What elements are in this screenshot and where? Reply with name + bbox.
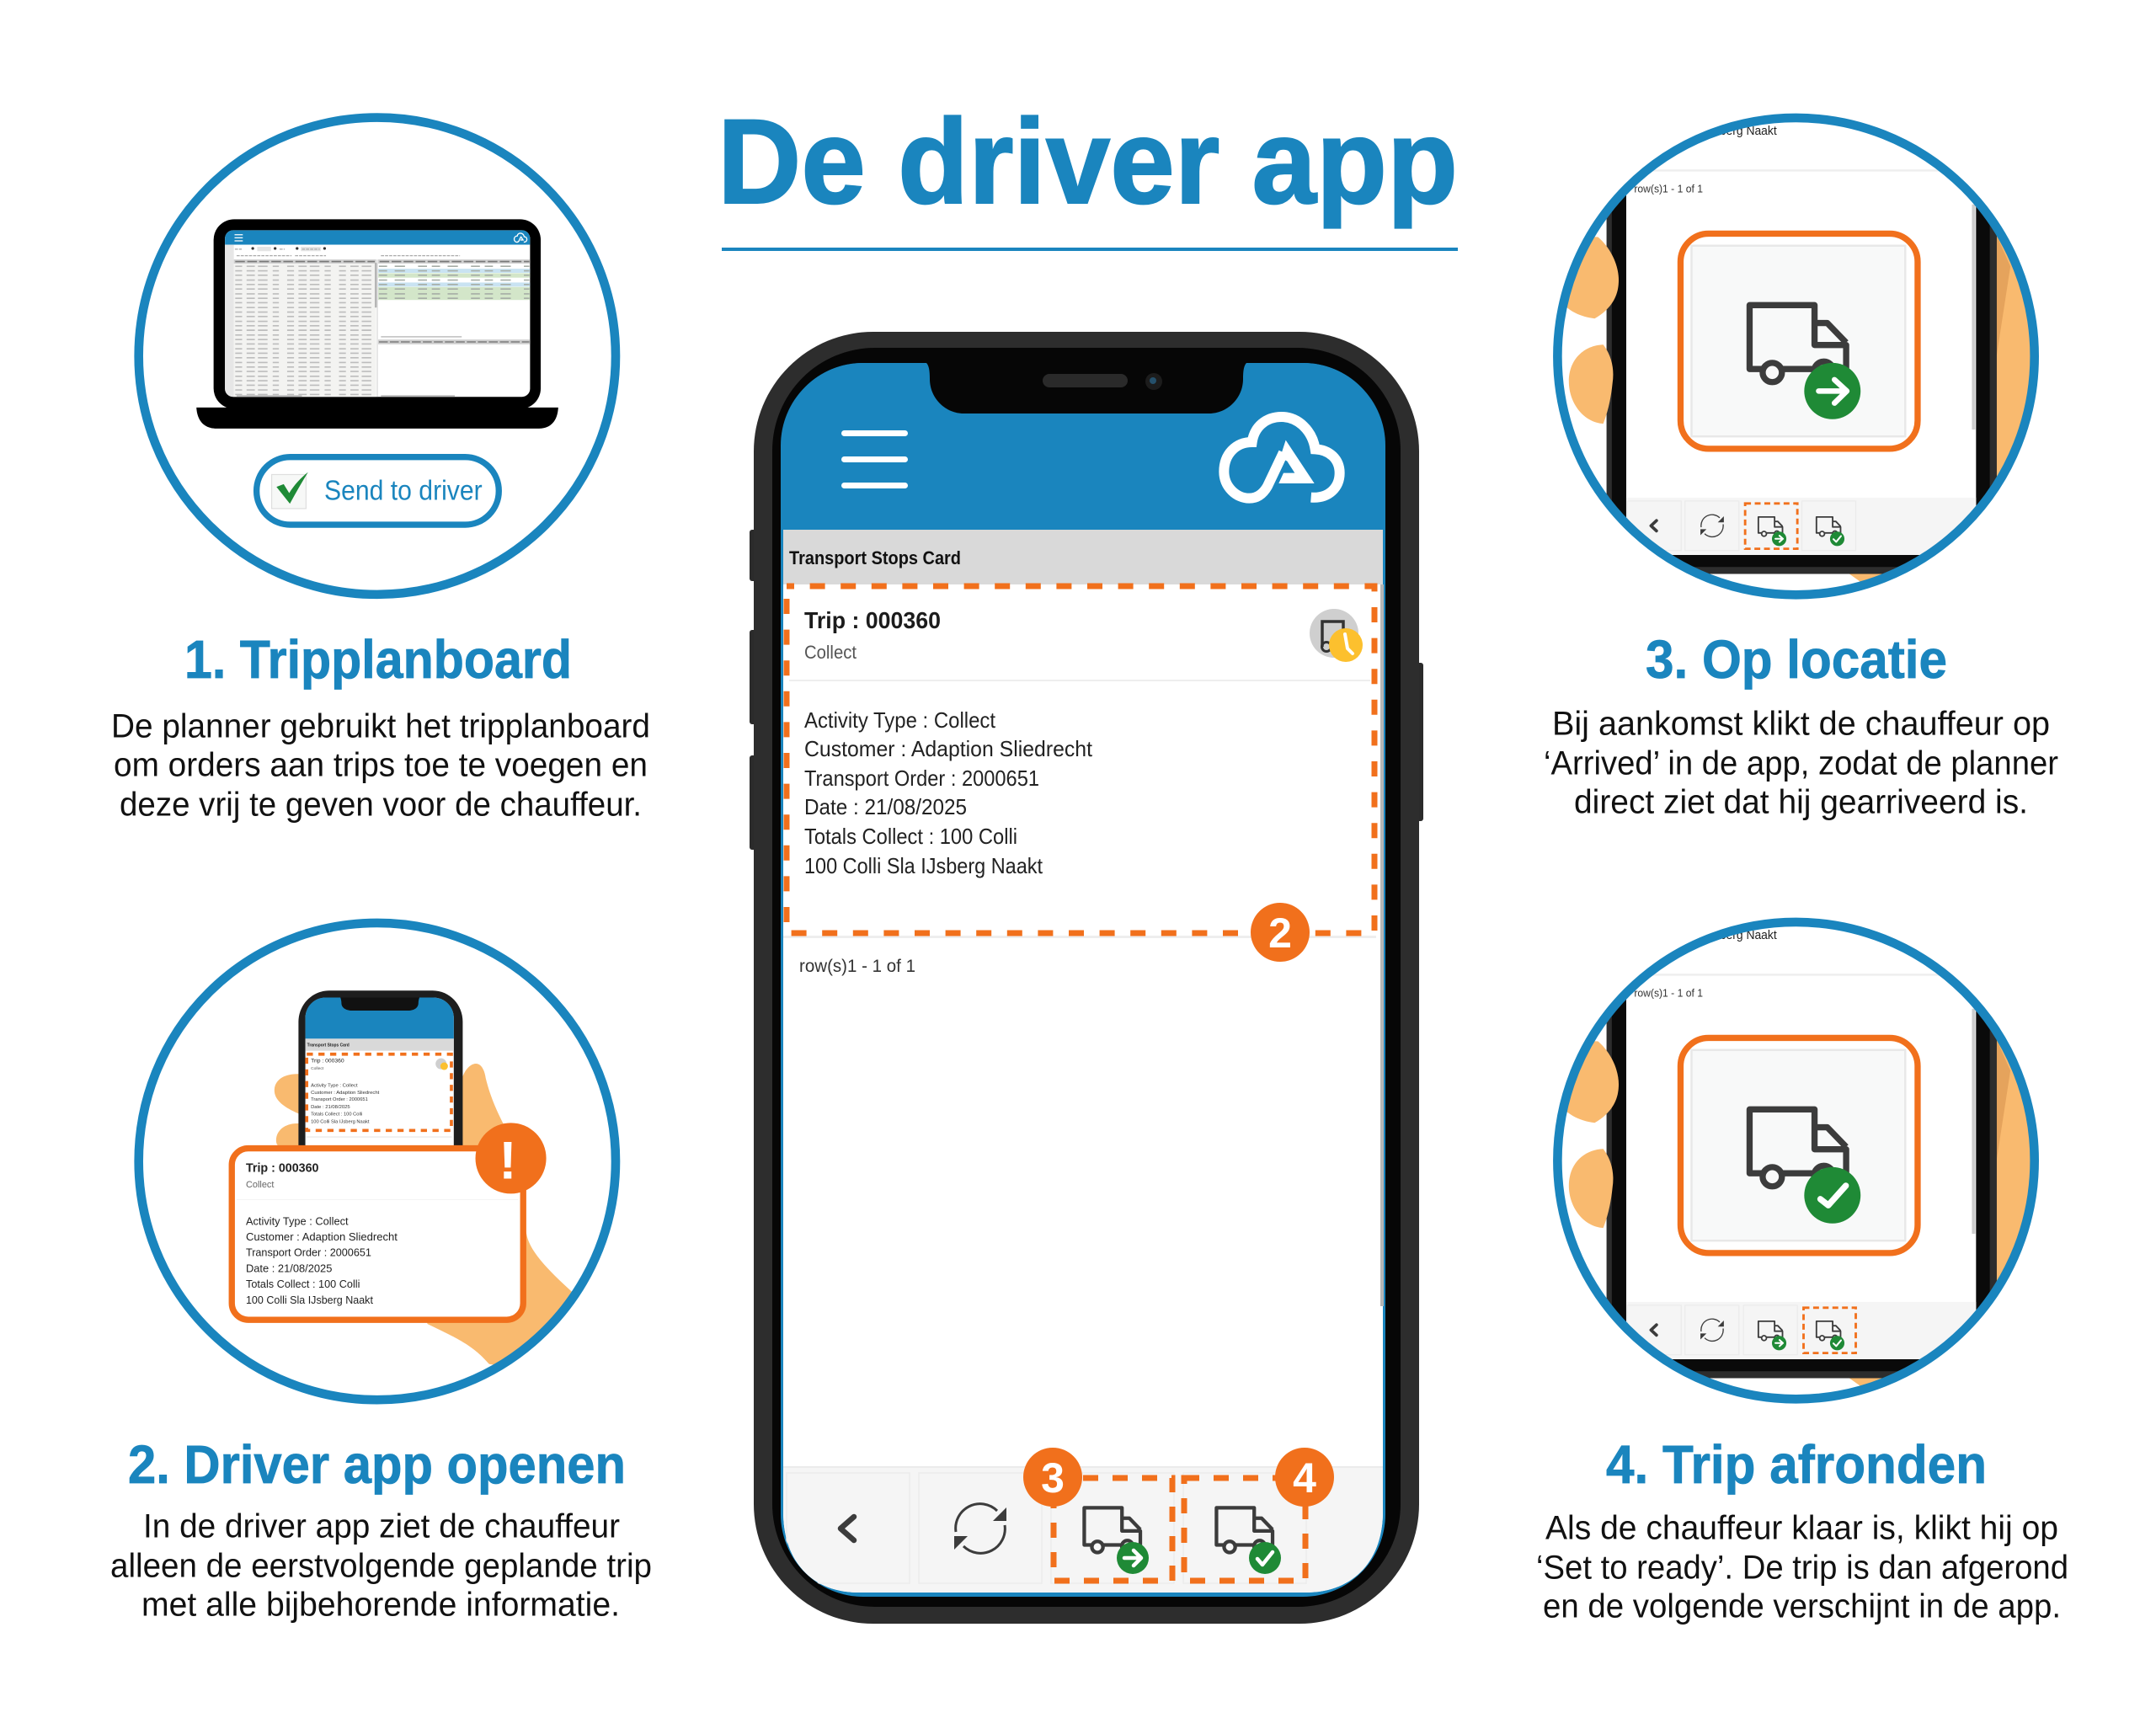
badge 3 <box>1023 1448 1082 1507</box>
icon: hand <box>275 1064 590 1374</box>
icon: refresh <box>954 1504 1006 1553</box>
panel: step 3 arrived circle: row(s)1 - 1 of 1 <box>1634 184 1703 195</box>
bottom toolbar <box>783 1466 1383 1593</box>
notch <box>926 363 1246 413</box>
icon: small phone: Collect <box>311 1066 324 1070</box>
text: step 2 description <box>110 1507 652 1624</box>
text: step 1 description <box>111 707 650 824</box>
badge 3: 3 <box>1041 1454 1065 1502</box>
trip card: Collect <box>804 642 857 663</box>
text: step 3 description: direct ziet dat hij gearriveerd is. <box>1574 783 2028 820</box>
icon: small phone <box>298 990 463 1145</box>
badge 2: 2 <box>1268 910 1292 957</box>
send to driver button: Send to driver <box>324 476 483 507</box>
icon: small phone: Totals Collect : 100 Colli <box>311 1112 362 1117</box>
badge 2 <box>1251 903 1310 962</box>
text: step 2 description: alleen de eerstvolgende geplande trip <box>110 1548 652 1585</box>
text: step 2 description: In de driver app ziet de chauffeur <box>143 1507 620 1545</box>
text: step 1 description: om orders aan trips toe te voegen en <box>114 746 648 783</box>
phone: main mockup <box>750 332 1423 1624</box>
panel: step 4 ready circle: 100 Colli Sla IJsberg Naakt <box>1636 929 1777 942</box>
icon: back chevron <box>841 1517 854 1540</box>
text: step 1 description: deze vrij te geven voor de chauffeur. <box>120 787 642 824</box>
trip card: Trip : 000360 <box>804 607 941 633</box>
screen body <box>783 530 1383 1593</box>
bottom toolbar <box>1626 498 1976 555</box>
text: step 4 description <box>1536 1509 2068 1625</box>
badge 4: 4 <box>1293 1454 1316 1502</box>
callout: trip card: Activity Type : Collect <box>246 1215 349 1228</box>
highlight: dashed ready button <box>1184 1478 1305 1581</box>
section bar: Transport Stops Card: Transport Stops Card <box>789 547 961 568</box>
highlight: dashed trip card <box>787 586 1374 933</box>
heading: step 4: 4. Trip afronden <box>1606 1434 1987 1495</box>
panel: step 4 ready circle <box>1553 922 2038 1399</box>
icon: small phone: Date : 21/08/2025 <box>311 1105 350 1110</box>
send to driver button <box>257 457 499 525</box>
panel: step 1 tripplanboard circle <box>139 118 616 595</box>
icon: small phone: Trip : 000360 <box>311 1059 344 1064</box>
panel: step 3 arrived circle <box>1553 118 2038 595</box>
callout: trip card: 100 Colli Sla IJsberg Naakt <box>246 1294 373 1306</box>
text: step 4 description: Als de chauffeur klaar is, klikt hij op <box>1545 1509 2058 1546</box>
text: step 1 description: De planner gebruikt het tripplanboard <box>111 707 650 744</box>
text: step 2 description: met alle bijbehorende informatie. <box>141 1587 620 1624</box>
badge 4 <box>1275 1448 1334 1507</box>
callout: trip card: Transport Order : 2000651 <box>246 1246 371 1259</box>
icon: cloud logo <box>1224 417 1340 499</box>
icon: laptop <box>196 219 558 429</box>
icon: alert badge <box>476 1123 547 1193</box>
text: step 3 description <box>1544 706 2058 820</box>
icon: small phone: Transport Order : 2000651 <box>311 1097 368 1102</box>
heading: step 3: 3. Op locatie <box>1646 629 1947 690</box>
title: De driver app <box>718 95 1458 229</box>
panel: step 2 driver app circle <box>139 923 616 1400</box>
text: step 3 description: Bij aankomst klikt de chauffeur op <box>1552 706 2050 743</box>
row count: row(s)1 - 1 of 1 <box>799 957 915 976</box>
icon: hand and phone edge <box>1566 1000 2030 1386</box>
icon: enlarged truck ready <box>1680 1038 1918 1253</box>
trip card: Activity Type : Collect <box>804 707 996 733</box>
trip card: 100 Colli Sla IJsberg Naakt <box>804 853 1043 878</box>
callout: trip card: Date : 21/08/2025 <box>246 1262 332 1274</box>
panel: step 3 arrived circle: 100 Colli Sla IJsberg Naakt <box>1636 125 1777 138</box>
trip card <box>789 607 1370 878</box>
text: step 4 description: en de volgende verschijnt in de app. <box>1543 1588 2061 1625</box>
bottom toolbar <box>1626 1302 1976 1359</box>
icon: truck arrived <box>1084 1507 1149 1574</box>
infographic canvas <box>111 113 2067 1625</box>
phone side buttons <box>750 530 1423 850</box>
text: step 4 description: ‘Set to ready’. De trip is dan afgerond <box>1536 1550 2068 1587</box>
icon: alert badge: ! <box>499 1131 516 1190</box>
trip card: Transport Order : 2000651 <box>804 766 1039 791</box>
icon: hamburger menu <box>841 430 908 488</box>
callout: trip card: Trip : 000360 <box>246 1161 318 1175</box>
trip card: Totals Collect : 100 Colli <box>804 824 1017 849</box>
icon: small phone: Customer : Adaption Sliedrecht <box>311 1091 380 1096</box>
callout: trip card: Totals Collect : 100 Colli <box>246 1278 360 1290</box>
heading: step 2: 2. Driver app openen <box>128 1434 626 1495</box>
highlight: dashed arrived button <box>1054 1478 1172 1581</box>
app header <box>803 363 1361 388</box>
icon: small phone: Transport Stops Card <box>307 1043 350 1048</box>
icon: truck status clock <box>1310 609 1363 662</box>
section bar: Transport Stops Card <box>783 530 1383 584</box>
icon: enlarged truck arrived <box>1680 233 1918 449</box>
text: step 3 description: ‘Arrived’ in de app, zodat de planner <box>1544 744 2058 782</box>
icon: small phone: Activity Type : Collect <box>311 1084 358 1089</box>
callout: trip card <box>232 1149 523 1320</box>
trip card: Date : 21/08/2025 <box>804 794 967 819</box>
callout: trip card: Collect <box>246 1180 274 1190</box>
callout: trip card: Customer : Adaption Sliedrecht <box>246 1230 398 1243</box>
icon: hand and phone edge <box>1566 195 2030 581</box>
trip card: Customer : Adaption Sliedrecht <box>804 736 1093 761</box>
icon: small phone: 100 Colli Sla IJsberg Naakt <box>311 1119 370 1124</box>
icon: truck ready <box>1216 1507 1281 1574</box>
heading: step 1: 1. Tripplanboard <box>184 629 572 690</box>
panel: step 4 ready circle: row(s)1 - 1 of 1 <box>1634 988 1703 1000</box>
